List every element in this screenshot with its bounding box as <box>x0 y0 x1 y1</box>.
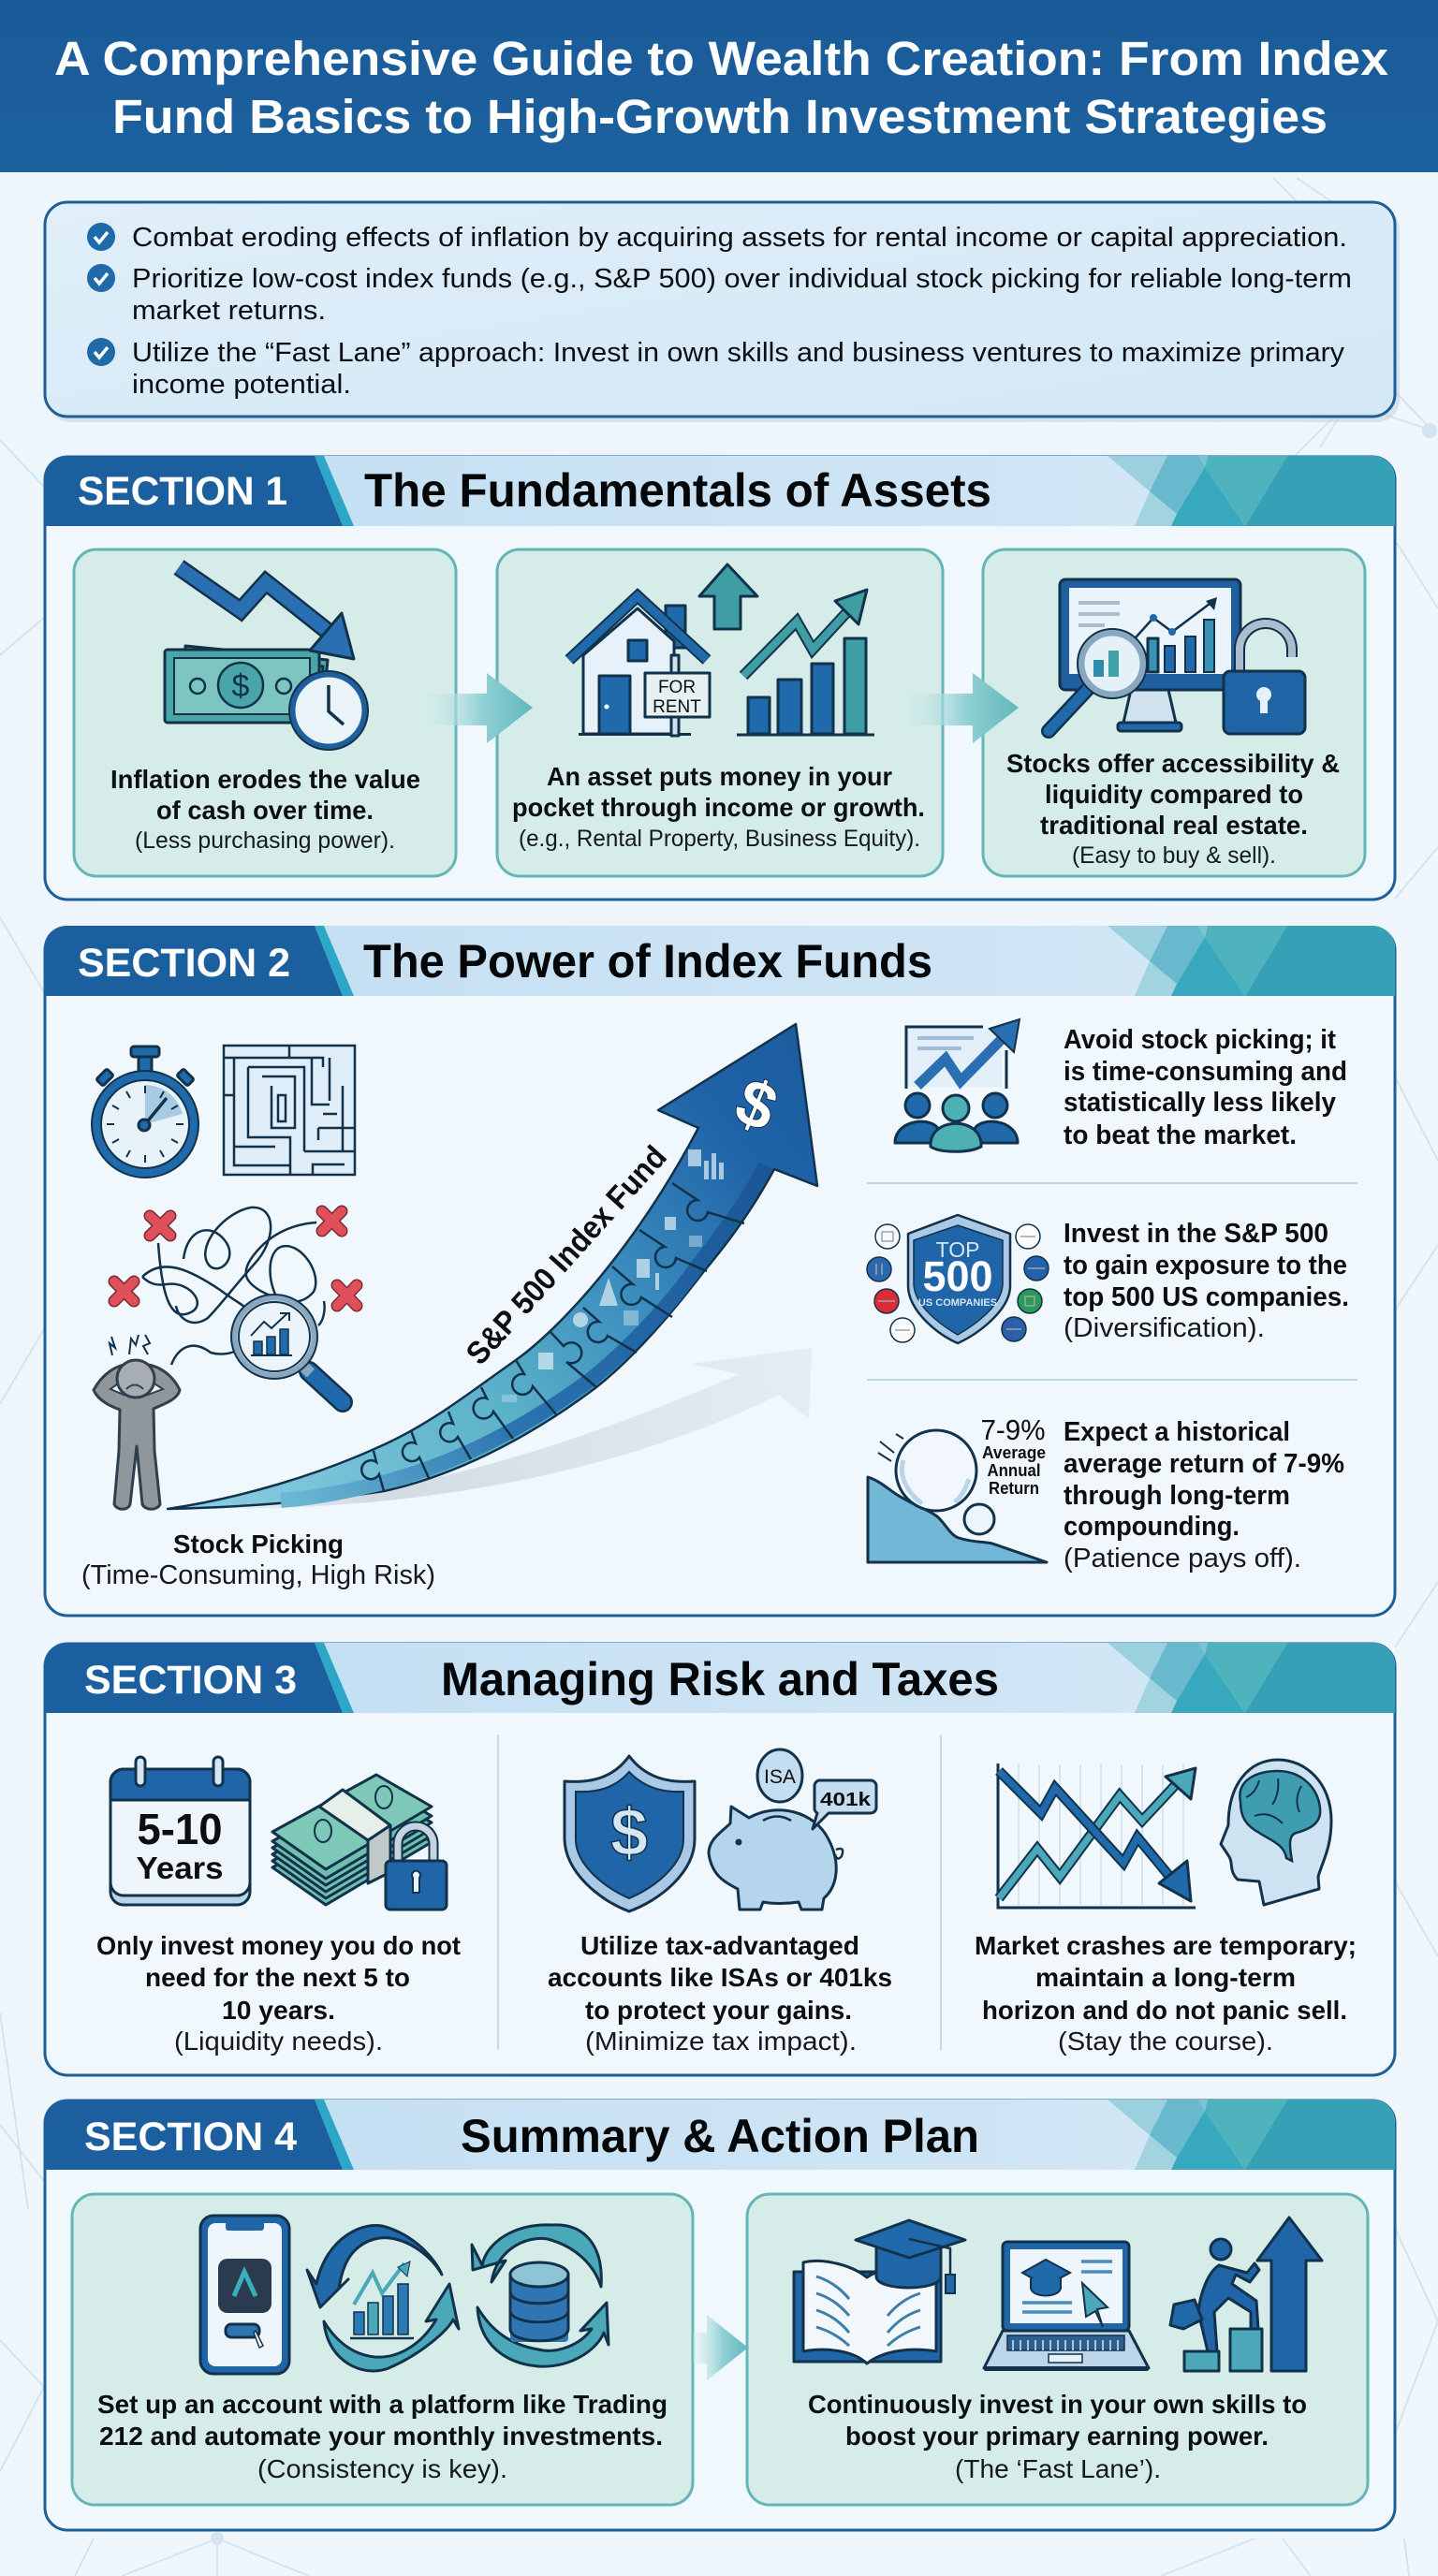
section 4 heading: Summary & Action Plan <box>461 2110 979 2162</box>
title banner: A Comprehensive Guide to Wealth Creation: From Index <box>54 32 1388 85</box>
icon: snowball compounding hill: 7-9% <box>981 1413 1045 1446</box>
takeaways text: market returns. <box>132 296 326 326</box>
icon: top 500 shield with company logos: 500 <box>922 1252 993 1300</box>
card: stocks <box>983 549 1365 876</box>
icon: piggy bank with ISA and 401k: ISA <box>764 1766 796 1788</box>
card text <box>808 2390 1307 2483</box>
card text: traditional real estate. <box>1040 811 1308 840</box>
section 2 heading: SECTION 2 <box>78 941 290 986</box>
item text: to gain exposure to the <box>1064 1251 1347 1281</box>
card text: (Less purchasing power). <box>135 827 395 854</box>
card text: of cash over time. <box>156 796 374 825</box>
icon: snowball compounding hill: Annual <box>987 1461 1041 1480</box>
card: automate investing <box>72 2194 693 2505</box>
icon: piggy bank with ISA and 401k: 401k <box>820 1790 872 1810</box>
item text <box>1064 1025 1347 1150</box>
item: invest in the S&P 500 <box>867 1215 1349 1343</box>
icon: calendar: 5-10 <box>137 1805 223 1853</box>
icon: dollar shield <box>565 1756 695 1911</box>
item: expected return <box>868 1413 1344 1573</box>
column text: (Stay the course). <box>1058 2027 1273 2056</box>
item text: is time-consuming and <box>1064 1057 1347 1087</box>
panel: section 2 power of index funds <box>44 926 1395 1616</box>
icon: stopwatch <box>96 1046 194 1173</box>
icon: house, for rent sign and growth chart: RENT <box>653 697 701 717</box>
icon: check 1 <box>87 223 115 251</box>
item text: compounding. <box>1064 1512 1240 1542</box>
column text: horizon and do not panic sell. <box>982 1996 1347 2025</box>
item text: Invest in the S&P 500 <box>1064 1219 1328 1249</box>
panel: section 3 managing risk and taxes <box>44 1643 1395 2075</box>
takeaways text: Combat eroding effects of inflation by acquiring assets for rental income or capital appreciation. <box>132 223 1347 253</box>
column: tax-advantaged accounts <box>548 1749 892 2056</box>
card text: boost your primary earning power. <box>845 2422 1269 2451</box>
icon: calendar <box>110 1757 250 1905</box>
icon: house, for rent sign and growth chart <box>569 564 874 736</box>
icon: cash, clock and falling arrow: $ <box>232 668 250 704</box>
icon: top 500 shield with company logos: TOP <box>936 1237 979 1262</box>
item text: to beat the market. <box>1064 1120 1297 1150</box>
icon: maze <box>224 1046 355 1175</box>
column text: accounts like ISAs or 401ks <box>548 1963 892 1992</box>
card text <box>1006 749 1340 869</box>
card: invest in skills <box>747 2194 1368 2505</box>
card text: pocket through income or growth. <box>512 793 925 822</box>
card: asset <box>497 549 943 876</box>
icon: house, for rent sign and growth chart: FOR <box>658 678 696 697</box>
card text: An asset puts money in your <box>547 762 892 791</box>
panel: key takeaways <box>45 202 1400 422</box>
label: stock picking: (Time-Consuming, High Risk) <box>81 1560 435 1590</box>
arrow: asset to stocks <box>904 673 1019 743</box>
column text: maintain a long-term <box>1035 1963 1296 1992</box>
icon: person climbing steps with up arrow <box>1170 2217 1322 2371</box>
column text: (Liquidity needs). <box>174 2027 383 2056</box>
card text: Continuously invest in your own skills to <box>808 2390 1307 2419</box>
icon: coins in cycle arrows <box>472 2225 609 2366</box>
chart arrow: S&P 500 index fund growth: $ <box>726 1064 787 1145</box>
icon: snowball compounding hill: Return <box>989 1479 1039 1498</box>
card: inflation <box>74 549 456 876</box>
column text: 10 years. <box>222 1996 335 2025</box>
card text: (The ‘Fast Lane’). <box>955 2454 1161 2483</box>
takeaways text: Utilize the “Fast Lane” approach: Invest in own skills and business ventures to maximize primary <box>132 338 1345 368</box>
icon: calendar: Years <box>137 1851 223 1885</box>
card text: Stocks offer accessibility & <box>1006 749 1340 778</box>
card text: 212 and automate your monthly investments. <box>99 2422 663 2451</box>
panel: section 4 summary and action plan <box>44 2100 1395 2530</box>
card text: liquidity compared to <box>1045 780 1303 809</box>
illustration: tangled stock picking with red crosses <box>114 1208 357 1365</box>
column text <box>548 1931 892 2056</box>
icon: monitor, magnifier and open lock <box>1049 579 1305 734</box>
icon: top 500 shield with company logos <box>867 1215 1049 1343</box>
section 2 heading <box>44 926 1395 996</box>
card text: (e.g., Rental Property, Business Equity). <box>519 826 920 852</box>
panel: section 1 fundamentals of assets <box>44 456 1395 900</box>
title banner: Fund Basics to High-Growth Investment Strategies <box>112 90 1328 143</box>
label: stock picking <box>81 1530 435 1590</box>
card text <box>512 762 925 852</box>
icon: check 3 <box>87 338 115 366</box>
icon: open book and graduation cap <box>794 2220 965 2364</box>
section 3 heading: SECTION 3 <box>84 1658 297 1703</box>
item text <box>1064 1219 1349 1343</box>
item: avoid stock picking <box>895 1019 1347 1151</box>
icon: chart in cycle arrows <box>307 2226 459 2371</box>
card text: Set up an account with a platform like Trading <box>97 2390 668 2419</box>
icon: laptop with course <box>984 2242 1149 2371</box>
arrow label: S&P 500 Index Fund <box>460 1139 674 1371</box>
icon: volatile market chart <box>998 1764 1196 1908</box>
section 3 heading: Managing Risk and Taxes <box>441 1653 999 1705</box>
section 2 heading: The Power of Index Funds <box>363 935 932 988</box>
column text: Utilize tax-advantaged <box>580 1931 859 1960</box>
arrow: automate to skills <box>693 2315 748 2380</box>
icon: snowball compounding hill: Average <box>982 1443 1046 1462</box>
item text: statistically less likely <box>1064 1088 1336 1118</box>
item text: top 500 US companies. <box>1064 1282 1349 1312</box>
section 1 heading: The Fundamentals of Assets <box>364 464 991 517</box>
title banner <box>0 0 1438 172</box>
column text: Market crashes are temporary; <box>975 1931 1357 1960</box>
section 1 heading: SECTION 1 <box>78 469 287 514</box>
column text: Only invest money you do not <box>96 1931 461 1960</box>
card text: (Consistency is key). <box>257 2454 507 2483</box>
icon: cash, clock and falling arrow <box>165 567 368 750</box>
icon: piggy bank with ISA and 401k <box>709 1749 876 1910</box>
section 3 heading <box>44 1643 1395 1713</box>
icon: stressed person <box>94 1335 180 1509</box>
section 4 heading: SECTION 4 <box>84 2115 297 2159</box>
takeaways text: income potential. <box>132 370 351 400</box>
item text <box>1064 1417 1344 1573</box>
icon: head with brain <box>1221 1760 1331 1905</box>
icon: dollar shield: $ <box>610 1795 648 1870</box>
item text: through long-term <box>1064 1481 1290 1511</box>
item text: (Patience pays off). <box>1064 1544 1301 1573</box>
takeaways text: Prioritize low-cost index funds (e.g., S&P 500) over individual stock picking for reliable long-term <box>132 264 1352 294</box>
card text: Inflation erodes the value <box>110 765 420 794</box>
label: stock picking: Stock Picking <box>173 1530 344 1559</box>
column text <box>975 1931 1357 2056</box>
section 4 heading <box>44 2100 1395 2170</box>
section 1 heading <box>44 456 1395 526</box>
column: time horizon <box>96 1757 461 2056</box>
shadow arrow: slow path <box>215 1348 812 1509</box>
card text <box>110 765 420 854</box>
icon: check 2 <box>87 264 115 292</box>
item text: Avoid stock picking; it <box>1064 1025 1336 1055</box>
item text: Expect a historical <box>1064 1417 1290 1447</box>
icon: team and trend board <box>895 1019 1020 1151</box>
column text: (Minimize tax impact). <box>585 2027 857 2056</box>
takeaways text <box>132 223 1352 400</box>
icon: top 500 shield with company logos: US COMPANIES <box>918 1297 997 1309</box>
icon: snowball compounding hill <box>868 1413 1047 1562</box>
column text: need for the next 5 to <box>145 1963 410 1992</box>
item text: average return of 7-9% <box>1064 1449 1344 1479</box>
card text <box>97 2390 668 2483</box>
card text: (Easy to buy & sell). <box>1072 842 1276 869</box>
icon: locked money stack <box>272 1775 447 1910</box>
column text: to protect your gains. <box>585 1996 852 2025</box>
item text: (Diversification). <box>1064 1313 1265 1343</box>
chart arrow: S&P 500 index fund growth <box>168 1024 817 1509</box>
arrow: inflation to asset <box>422 673 533 743</box>
icon: phone app <box>200 2216 289 2374</box>
column: stay the course <box>975 1760 1357 2056</box>
column text <box>96 1931 461 2056</box>
icon: magnifier with chart <box>231 1295 343 1402</box>
